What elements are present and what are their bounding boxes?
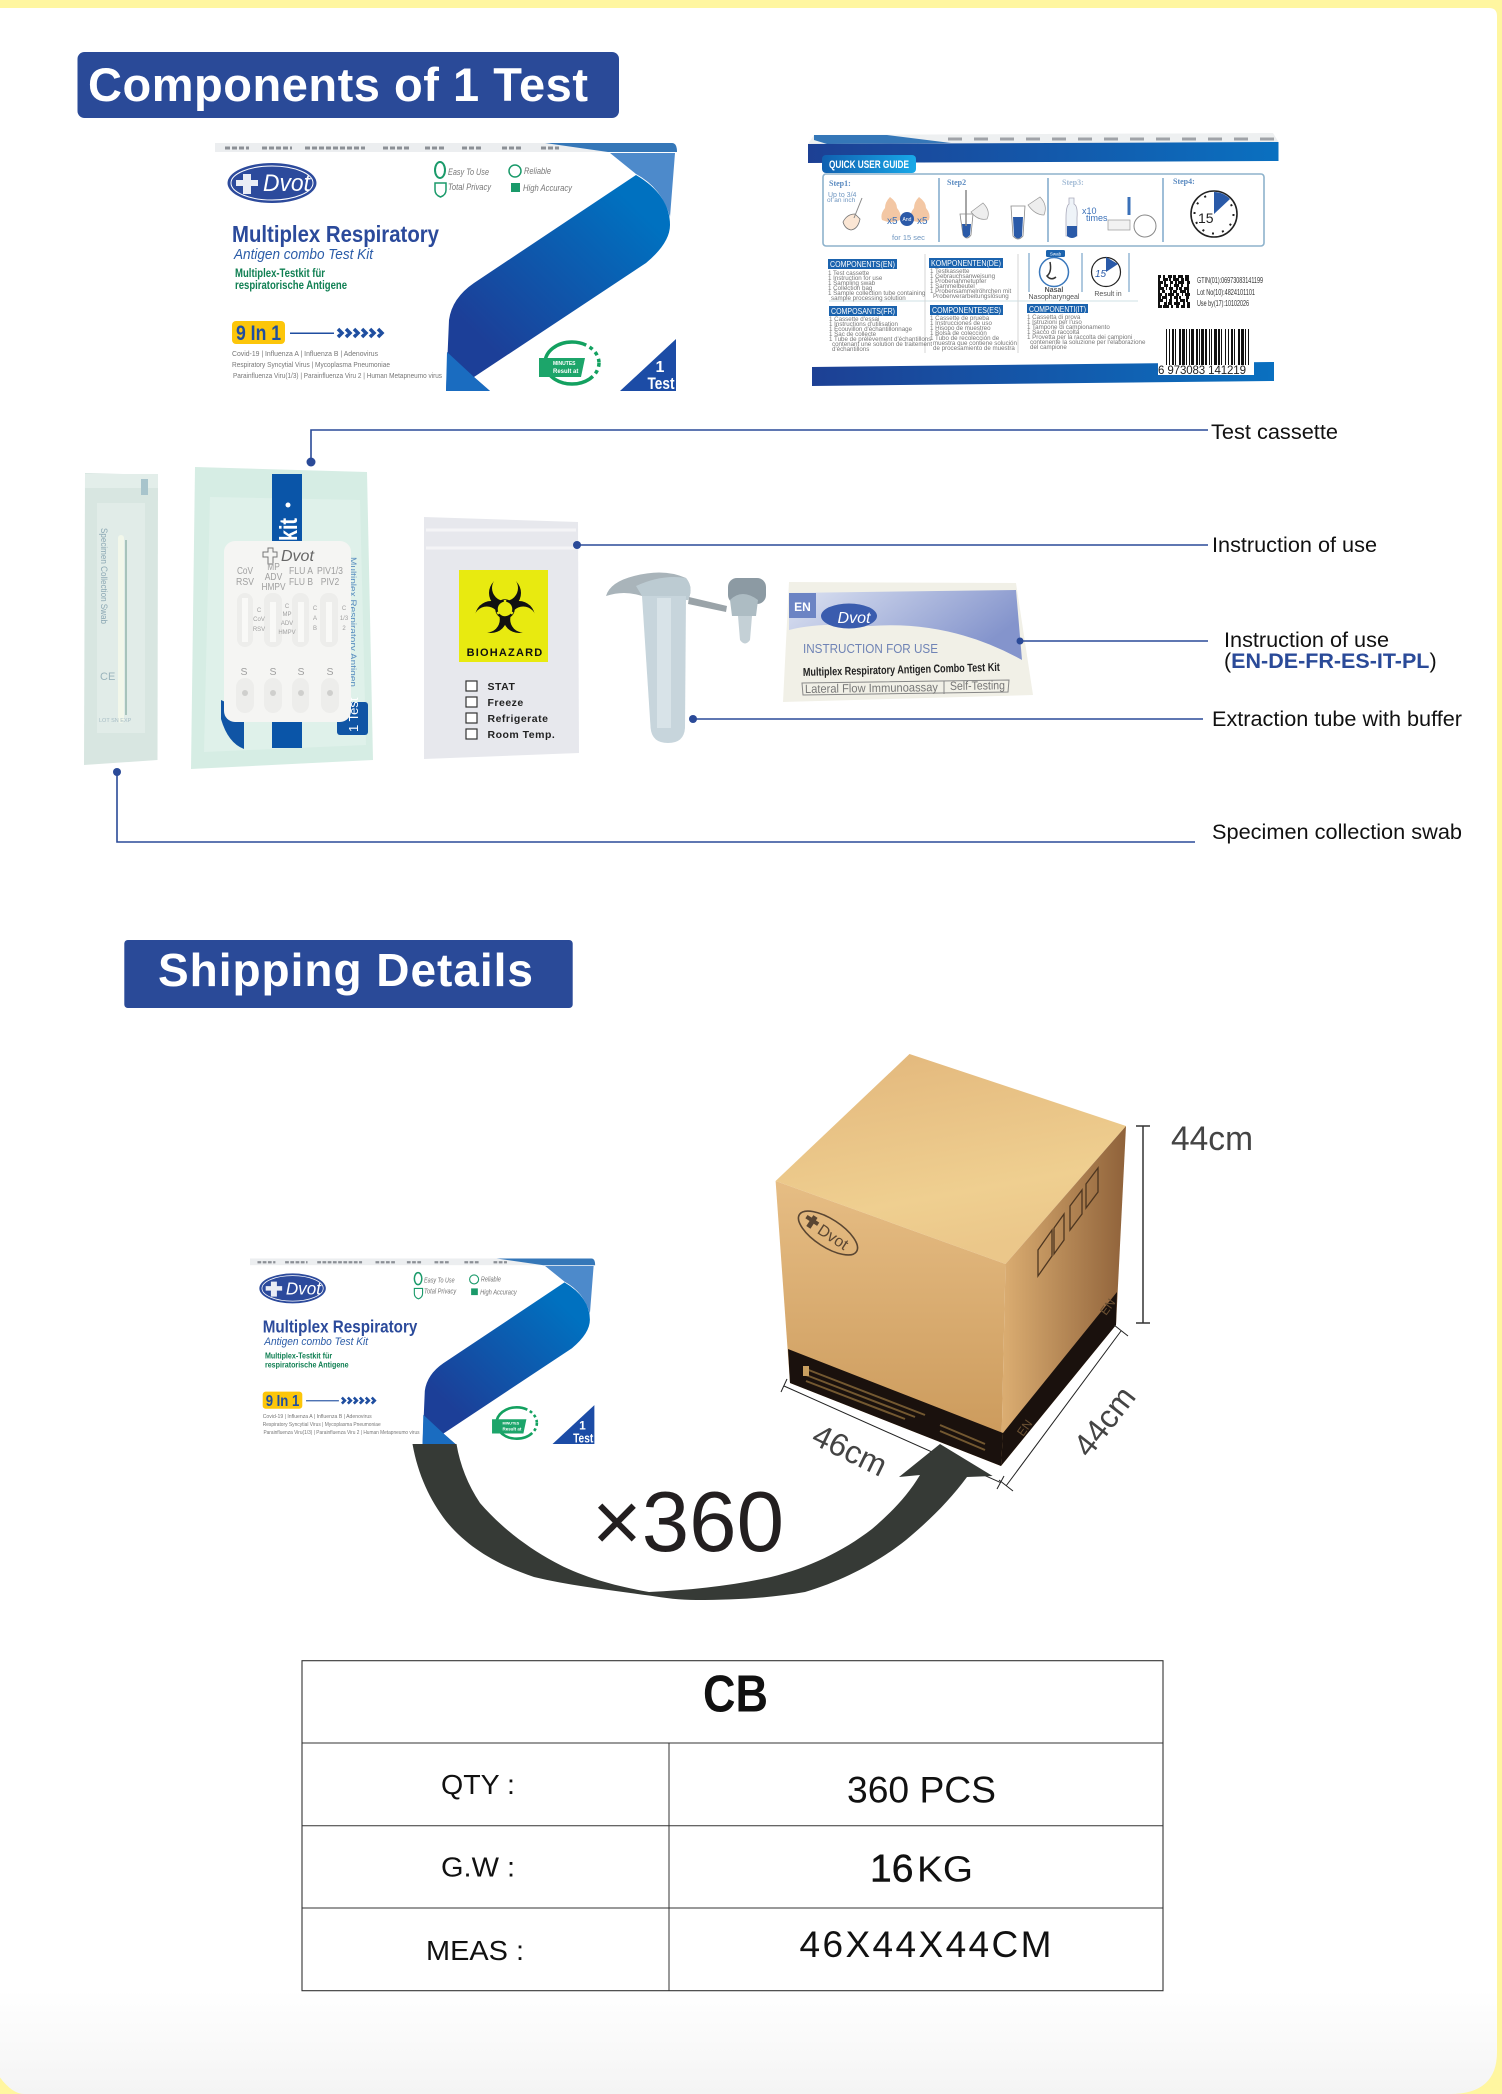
product box back [808,133,1278,386]
test cassette: RSV [253,627,265,633]
product box front: 9 In 1 [236,322,281,345]
product box front: Covid-19 | Influenza A | Influenza B | Adenovirus [232,349,378,358]
biohazard label [459,570,548,662]
multilingual component lists: 1 Bolsa de colección [930,330,987,337]
small product box: respiratorische Antigene [265,1360,349,1370]
quick guide steps panel: Step4: [1173,177,1195,186]
multilingual component lists: 1 Sample collection tube containing [828,290,926,297]
datamatrix code and lot info [1158,275,1263,309]
test cassette: PIV1/3 [317,565,343,577]
multilingual component lists: 1 Cassette d'essai [829,316,879,323]
nasal and result icons [1029,250,1129,301]
small product box [250,1258,595,1445]
row: quantity: 360 PCS [847,1770,996,1811]
carton logo [792,1203,864,1263]
cassette pouch: kit [275,517,303,541]
instruction booklet: INSTRUCTION FOR USE [803,642,938,656]
barcode [1158,328,1254,377]
multilingual component lists: 1 Instrucciones de uso [930,320,992,327]
multilingual component lists: 1 Provetta per la raccolta dei campioni [1027,334,1132,341]
test cassette: ADV [265,571,282,583]
instruction booklet: Multiplex Respiratory Antigen Combo Test Kit [803,662,1000,679]
multilingual component lists: sample processing solution [831,295,906,302]
row: quantity [441,1769,996,1811]
product box front: Easy To Use [448,167,489,178]
swab pack: Specimen Collection Swab [98,528,109,624]
callout line: extraction tube [689,715,1203,723]
bag checklist: Freeze [488,697,524,709]
small product box: MINUTES [502,1422,520,1426]
multilingual component lists: KOMPONENTEN(DE) [931,258,1001,268]
swab pack: LOT SN EXP [99,718,132,724]
test cassette: RSV [236,576,254,588]
test cassette: CoV [253,617,265,623]
product box front: Reliable [524,166,551,177]
row: quantity: QTY : [441,1769,515,1800]
multilingual component lists: 1 Probensammelröhrchen mit [930,288,1011,295]
quick guide steps panel: And [903,217,912,223]
small product box: Test [573,1431,594,1445]
quick guide steps panel: x5 [917,216,928,227]
nasal and result icons: Result in [1094,291,1122,298]
callout line: test cassette [306,430,1208,466]
row: gross weight [441,1848,973,1891]
instruction booklet: Dvot [838,610,871,627]
label: instruction of use languages [1224,628,1437,673]
label: instruction of use languages: (EN-DE-FR-ES-IT-PL) [1224,649,1437,673]
multilingual component lists: 1 Sacco di raccolta [1027,329,1080,336]
test cassette: S [326,666,334,678]
row: gross weight: 16 [870,1848,913,1891]
small product box: High Accuracy [480,1288,517,1296]
multilingual component lists: Probenverarbeitungslösung [933,293,1009,300]
multilingual component lists: 1 Cassette de prueba [930,315,990,322]
barcode: 6 973083 141219 [1158,365,1246,377]
test cassette: FLU A [289,565,313,577]
quick guide steps panel: Step1: [829,179,851,188]
multilingual component lists: muestra que contiene solución [933,340,1017,347]
test cassette: S [269,666,277,678]
label: specimen collection swab: Specimen collection swab [1212,820,1462,844]
test cassette: FLU B [289,576,313,588]
small product box: Easy To Use [424,1276,455,1284]
swab pack [84,473,158,765]
small product box: Respiratory Syncytial Virus | Mycoplasma Pneumoniae [263,1422,381,1428]
carton logo: Dvot [814,1222,851,1254]
multilingual component lists: 1 Testkassette [930,268,970,275]
multilingual component lists: 1 Collection bag [828,285,873,292]
table: carton specification [302,1661,1163,1991]
product box front: Dvot [263,170,311,197]
curved arrow [412,1444,993,1600]
shipping carton [776,1054,1126,1466]
small product box: Multiplex Respiratory [263,1317,418,1337]
product box front: Parainfluenza Viru(1/3) | Parainfluenza Viru 2 | Human Metapneumo virus [233,371,442,380]
instruction booklet: Lateral Flow Immunoassay [805,680,938,696]
quick guide steps panel: 15 [1198,210,1214,226]
quick guide steps panel: x10 [1082,206,1097,216]
swab pack: CE [100,671,115,683]
multilingual component lists: 1 Tampone di campionamento [1027,324,1110,331]
product box front: Antigen combo Test Kit [233,246,374,263]
test cassette: CoV [237,565,253,577]
product box front: Total Privacy [448,182,492,193]
small product box: Total Privacy [424,1288,457,1296]
multilingual component lists: 1 Cassetta di prova [1027,314,1081,321]
carton handling icons [1038,1168,1098,1276]
extraction tube with cap [606,572,766,743]
test cassette: S [297,666,305,678]
callout line: instruction of use (bag) [573,541,1208,549]
dimension: length 46cm [781,1379,1004,1489]
quick user guide pill: QUICK USER GUIDE [829,159,909,171]
product box front: Multiplex-Testkit für [235,268,325,280]
label: test cassette: Test cassette [1211,420,1338,444]
small product box: Covid-19 | Influenza A | Influenza B | Adenovirus [263,1414,372,1420]
product box front: 1 [656,359,665,376]
test cassette: ADV [281,621,293,627]
test cassette: Dvot [281,548,314,565]
product box front: Multiplex Respiratory [232,221,439,247]
dimension: height 44cm [1136,1120,1253,1323]
test cassette: C [313,606,318,612]
bag checklist: Room Temp. [488,729,555,741]
row: gross weight: G.W : [441,1852,515,1883]
quick guide steps panel: Step3: [1062,178,1084,187]
test cassette: HMPV [262,581,286,593]
label: extraction tube with buffer: Extraction tube with buffer [1212,707,1462,731]
quick guide steps panel: Up to 3/4 [828,192,857,199]
instruction booklet [783,582,1033,702]
product box front [215,143,677,393]
test cassette: HMPV [278,630,296,636]
multilingual component lists: 1 Sac de collecte [829,331,877,338]
multilingual component lists: 1 Hisopo de muestreo [930,325,991,332]
biohazard bag [424,517,579,759]
label: instruction of use languages: Instruction of use [1224,628,1389,652]
test cassette: C [257,608,262,614]
multilingual component lists: 1 Tubo de recolección de [930,335,1000,342]
dimension: length 46cm: 46cm [807,1417,893,1483]
product box front: Respiratory Syncytial Virus | Mycoplasma Pneumoniae [232,360,390,369]
cassette pouch: Multiplex Respiratory Antigen [348,557,358,687]
multilingual component lists: 1 Sampling swab [828,280,876,287]
nasal and result icons: Nasopharyngeal [1029,294,1080,301]
test cassette: 1/3 [340,616,349,622]
multilingual component lists: del campione [1030,344,1067,351]
test cassette [224,541,351,722]
datamatrix code and lot info: GTIN(01):06973083141199 [1197,275,1263,285]
small product box: 9 In 1 [266,1393,300,1410]
small product box: Parainfluenza Viru(1/3) | Parainfluenza Viru 2 | Human Metapneumo virus [263,1430,420,1436]
test cassette: A [313,616,317,622]
product box front: High Accuracy [523,183,573,194]
shipping carton: EN [1014,1417,1035,1439]
row: measurements: MEAS : [426,1935,524,1966]
multilingual component lists: COMPOSANTS(FR) [831,306,895,316]
instruction booklet: Self-Testing [950,678,1005,693]
instruction booklet: EN [794,600,811,614]
row: measurements: 46X44X44CM [800,1924,1052,1965]
multilingual component lists: 1 Instruction for use [828,275,883,282]
datamatrix code and lot info: Lot No(10):4824101101 [1197,287,1255,297]
quick guide steps panel: of an inch [827,197,856,204]
heading: Shipping Details: Shipping Details [158,944,533,996]
multilingual component lists: 1 Instructions d'utilisation [829,321,898,328]
multilingual component lists: 1 Test cassette [828,270,870,277]
quick guide steps panel: times [1086,213,1108,223]
bag checklist: STAT [488,681,515,693]
test cassette: MP [267,561,280,573]
heading: Components of 1 Test: Components of 1 Test [88,58,588,111]
test cassette: B [313,626,317,632]
table title: CB [703,1666,768,1724]
small product box: 1 [579,1419,586,1433]
multilingual component lists: 1 Gebrauchsanweisung [930,273,996,280]
heading: Shipping Details [124,940,573,1008]
quick guide steps panel [823,174,1264,246]
multilingual component lists: 1 Sammelbeutel [930,283,975,290]
multilingual component lists: 1 Istruzioni per l'uso [1027,319,1082,326]
datamatrix code and lot info: Use by(17):10102026 [1197,298,1249,308]
multilingual component lists: de procesamiento de muestra [933,345,1015,352]
quick user guide pill [822,155,916,173]
test cassette: S [240,666,248,678]
test cassette: C [342,606,347,612]
multilingual component lists: 1 Tube de prélèvement d'échantillons [829,336,931,343]
multilingual component lists: contenente la soluzione per l'elaborazione [1030,339,1146,346]
shipping carton: EN [1097,1296,1118,1318]
nasal and result icons: 15 [1095,269,1107,280]
small product box: Reliable [481,1276,501,1284]
quick guide steps panel: Step2 [947,178,966,187]
multilingual component lists: d'échantillons [832,346,869,353]
small product box: Dvot [286,1278,322,1298]
multiplier: ×360 [592,1475,784,1570]
test cassette: PIV2 [321,576,339,588]
product box front: Test [648,374,675,393]
callout line: specimen swab [113,768,1195,842]
small product box: Result at [502,1427,522,1432]
label: instruction of use: Instruction of use [1212,533,1377,557]
bag checklist: Refrigerate [488,713,548,725]
small product box: Multiplex-Testkit für [265,1351,333,1361]
cassette pouch [191,467,373,769]
product box front: Result at [553,369,578,375]
multilingual component lists: COMPONENTI(IT) [1029,304,1086,314]
multilingual component lists: 1 Probenahmetupfer [930,278,986,285]
multilingual component lists: COMPONENTS(EN) [830,259,895,269]
quick guide steps panel: x5 [887,216,898,227]
dimension: width 44cm [999,1325,1143,1491]
test cassette: C [285,604,290,610]
row: gross weight: KG [917,1849,973,1890]
row: measurements [426,1924,1052,1966]
biohazard label: BIOHAZARD [467,647,543,659]
product box front: respiratorische Antigene [235,280,347,292]
nasal and result icons: Swab [1050,252,1062,256]
multilingual component lists [828,254,1147,353]
test cassette: 2 [342,626,346,632]
dimension: width 44cm: 44cm [1066,1379,1143,1463]
multilingual component lists: contenant une solution de traitement [832,341,932,348]
test cassette: MP [282,612,292,618]
small product box: Antigen combo Test Kit [263,1336,369,1348]
quick guide steps panel: for 15 sec [892,233,925,242]
cassette pouch: 1 Test [346,697,361,732]
nasal and result icons: Nasal [1045,287,1063,294]
product box front: MINUTES [553,361,576,367]
callout line: instruction of use (booklet) [1016,638,1208,644]
multilingual component lists: 1 Écouvillon d'échantillonnage [829,326,913,333]
bag checklist [466,681,555,741]
multilingual component lists: COMPONENTES(ES) [932,305,1001,315]
dimension: height 44cm: 44cm [1171,1120,1253,1158]
